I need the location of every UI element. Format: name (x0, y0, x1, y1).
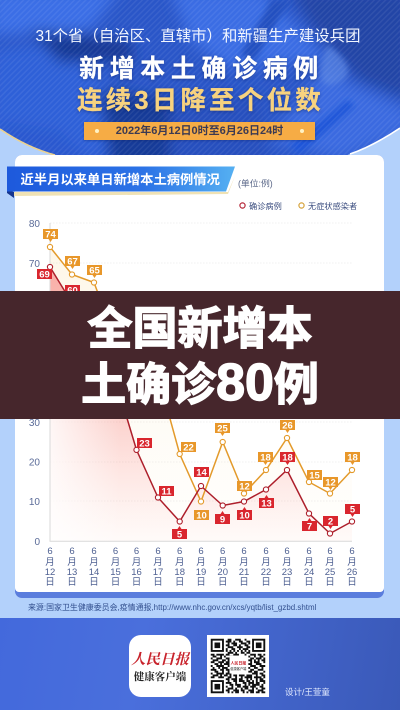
x axis labels: 月 (282, 557, 292, 568)
x axis labels: 月 (239, 557, 249, 568)
app logo (129, 635, 191, 697)
legend (240, 201, 357, 211)
x axis labels: 月 (45, 557, 55, 568)
x axis labels: 25 (325, 567, 335, 578)
x axis labels: 月 (175, 557, 184, 568)
asymptomatic value labels: 18 (260, 452, 271, 464)
footer band (0, 618, 400, 710)
subtitle line: 31个省（自治区、直辖市）和新疆生产建设兵团 (36, 28, 360, 45)
confirmed value labels: 5 (177, 530, 183, 540)
y axis labels (29, 219, 40, 548)
x axis labels (45, 546, 357, 588)
x axis labels: 15 (110, 567, 121, 578)
x axis labels: 日 (347, 577, 357, 588)
x axis labels: 20 (217, 567, 228, 578)
confirmed value labels: 18 (282, 452, 293, 464)
asymptomatic value labels: 10 (196, 510, 207, 522)
asymptomatic value labels: 15 (309, 470, 320, 482)
chart (29, 178, 360, 588)
date text: 2022年6月12日0时至6月26日24时 (116, 125, 283, 137)
confirmed value labels: 60 (67, 286, 78, 296)
x axis labels: 6 (69, 546, 75, 557)
confirmed value labels: 23 (139, 438, 150, 450)
y axis labels: 30 (29, 418, 40, 429)
x axis labels: 13 (67, 567, 77, 578)
asymptomatic value labels (43, 229, 360, 522)
x axis labels: 日 (153, 577, 163, 588)
grid lines (50, 223, 352, 501)
x axis labels: 6 (198, 546, 204, 557)
x axis labels: 日 (304, 577, 314, 588)
date bar (84, 122, 315, 140)
confirmed value labels: 2 (328, 516, 333, 528)
confirmed value labels: 13 (261, 498, 272, 510)
confirmed value labels: 69 (39, 270, 50, 280)
confirmed value labels: 10 (239, 510, 250, 522)
x axis labels: 日 (67, 577, 77, 588)
x axis labels: 日 (45, 577, 55, 588)
x axis labels: 14 (89, 567, 99, 578)
y axis labels: 20 (29, 458, 40, 468)
x axis labels: 月 (89, 557, 99, 568)
x axis labels: 24 (304, 567, 314, 578)
x axis labels: 6 (177, 546, 182, 557)
x axis labels: 6 (349, 546, 355, 557)
x axis labels: 19 (196, 567, 206, 578)
x axis labels: 月 (325, 557, 335, 568)
x axis labels: 18 (174, 567, 185, 578)
asymptomatic value labels: 25 (217, 424, 228, 434)
y axis labels: 80 (29, 219, 40, 230)
area left fade (50, 400, 120, 541)
x axis labels: 日 (325, 577, 335, 588)
designer credit: 设计/王萱童 (285, 687, 330, 697)
x axis labels: 月 (347, 557, 357, 568)
source note: 来源:国家卫生健康委员会,疫情通报,http://www.nhc.gov.cn/xcs/yqtb/list_gzbd.shtml (28, 603, 316, 612)
x axis labels: 26 (347, 567, 357, 578)
x axis labels: 6 (220, 546, 225, 557)
asymptomatic value labels: 74 (45, 230, 56, 240)
headline line one: 全国新增本 (87, 303, 312, 354)
asymptomatic area (50, 247, 352, 541)
x axis labels: 17 (153, 567, 163, 578)
chart title ribbon (7, 166, 235, 198)
x axis labels: 日 (175, 577, 184, 588)
date bar left dot (95, 129, 99, 133)
x axis labels: 23 (282, 567, 292, 578)
confirmed value labels: 7 (307, 522, 312, 532)
x axis labels: 日 (218, 577, 227, 588)
confirmed value labels: 11 (161, 486, 172, 498)
x axis labels: 日 (89, 577, 99, 588)
x axis labels: 月 (153, 557, 163, 568)
logo red brand name: 人民日报 (131, 652, 189, 668)
headline line two: 土确诊80例 (81, 354, 319, 412)
confirmed value labels: 9 (220, 514, 225, 526)
x axis labels: 16 (131, 567, 142, 578)
asymptomatic value labels: 12 (239, 482, 250, 492)
x axis labels: 22 (261, 567, 271, 578)
QR code: 健康客户端 (230, 666, 247, 671)
header photo background (0, 0, 400, 155)
date bar right dot (300, 129, 304, 133)
x axis labels: 12 (45, 567, 55, 578)
x axis labels: 6 (327, 546, 333, 557)
confirmed area (50, 267, 352, 541)
asymptomatic value labels: 65 (89, 266, 100, 276)
x axis labels: 6 (241, 546, 247, 557)
confirmed value labels (37, 269, 360, 540)
x axis labels: 日 (132, 577, 141, 588)
x axis labels: 6 (47, 546, 53, 557)
x axis labels: 日 (196, 577, 206, 588)
x axis labels: 月 (67, 557, 77, 568)
card white surface (15, 155, 384, 592)
confirmed line (47, 264, 355, 536)
logo black app name: 健康客户端 (134, 672, 186, 683)
y axis labels: 0 (34, 537, 40, 548)
x axis labels: 6 (113, 546, 118, 557)
x axis labels: 月 (132, 557, 141, 568)
legend: 确诊病例 (249, 201, 282, 211)
y axis labels: 70 (29, 259, 40, 270)
asymptomatic value labels: 26 (282, 420, 293, 432)
y axis labels: 10 (29, 497, 40, 508)
QR code: 人民日报 (231, 661, 246, 666)
axes (50, 223, 352, 541)
x axis labels: 日 (282, 577, 292, 588)
highlighted title line: 连续3日降至个位数 (77, 87, 324, 115)
x axis labels: 6 (284, 546, 290, 557)
x axis labels: 月 (218, 557, 227, 568)
x axis labels: 日 (239, 577, 249, 588)
legend: 无症状感染者 (308, 201, 357, 211)
confirmed value labels: 14 (196, 468, 207, 478)
QR code (207, 635, 269, 697)
asymptomatic value labels: 67 (67, 256, 78, 268)
x axis labels: 月 (196, 557, 206, 568)
x axis labels: 6 (91, 546, 97, 557)
x axis labels: 月 (304, 557, 314, 568)
x axis labels: 6 (306, 546, 312, 557)
x axis labels: 6 (263, 546, 269, 557)
chart card (15, 155, 384, 598)
x axis labels: 6 (155, 546, 161, 557)
x axis labels: 日 (261, 577, 271, 588)
x axis labels: 6 (134, 546, 139, 557)
chart title ribbon: 近半月以来单日新增本土病例情况 (20, 171, 221, 187)
asymptomatic line (47, 244, 355, 504)
main title line: 新增本土确诊病例 (79, 55, 324, 83)
x axis labels: 月 (261, 557, 271, 568)
x axis labels: 日 (111, 577, 120, 588)
confirmed value labels: 5 (350, 504, 356, 516)
x axis labels: 月 (111, 557, 120, 568)
asymptomatic value labels: 22 (183, 442, 194, 454)
headline banner (0, 291, 400, 419)
asymptomatic value labels: 12 (325, 478, 336, 488)
asymptomatic value labels: 18 (347, 452, 358, 464)
unit note: (单位:例) (238, 178, 273, 188)
x axis labels: 21 (239, 567, 249, 578)
